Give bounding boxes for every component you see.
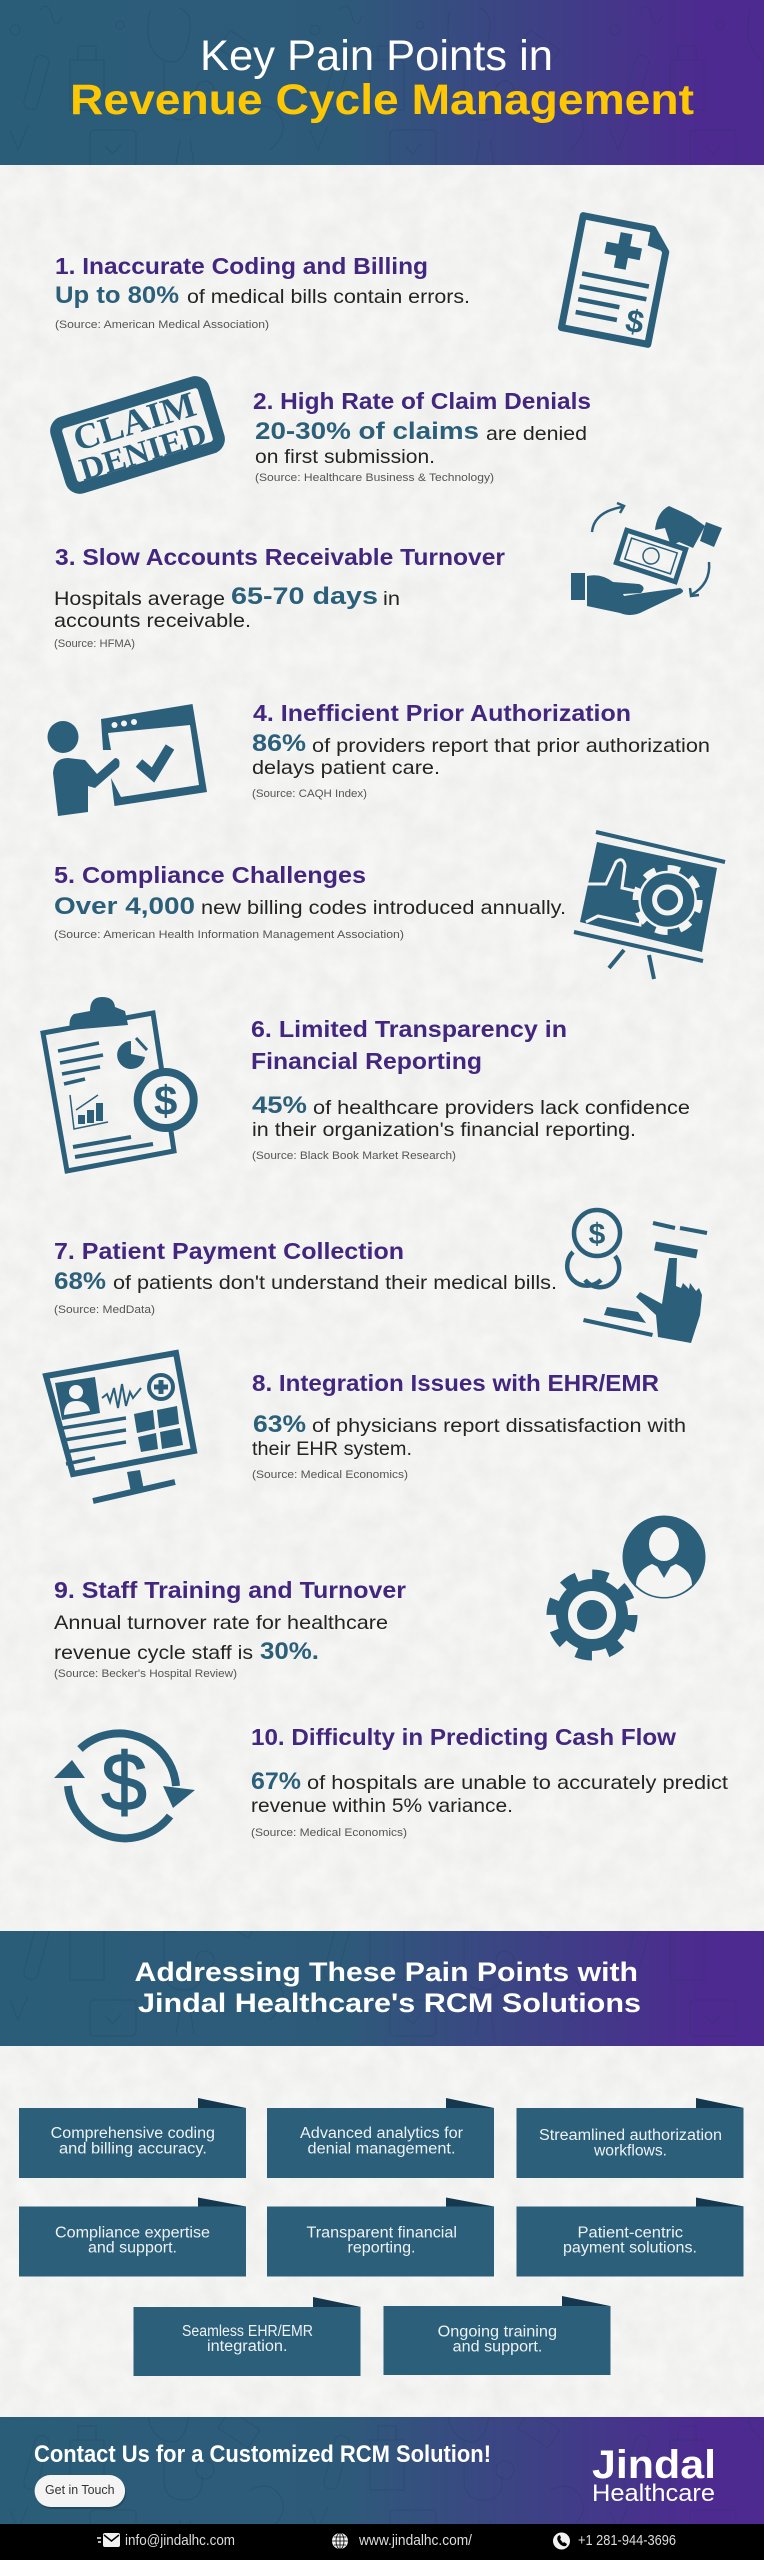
statement 6: 45% bbox=[252, 1092, 307, 1119]
icon: gear and staff person bbox=[552, 1516, 706, 1655]
statement 1: Up to 80% bbox=[55, 282, 179, 309]
card 8 bbox=[384, 2296, 610, 2375]
card 3: Streamlined authorization bbox=[539, 2127, 722, 2144]
solutions heading text bbox=[134, 1957, 641, 2018]
card 1: Comprehensive coding bbox=[51, 2125, 215, 2142]
statement 10 bbox=[251, 1768, 729, 1817]
panel: item 2 claim denials bbox=[54, 380, 591, 491]
statement 2: 20-30% of claims bbox=[255, 418, 479, 445]
source 4: (Source: CAQH Index) bbox=[252, 788, 367, 800]
panel: item 9 staff turnover bbox=[54, 1516, 706, 1680]
icon: circular arrows with dollar bbox=[54, 1733, 195, 1838]
statement 4: of providers report that prior authorization bbox=[312, 735, 710, 757]
solutions heading banner bbox=[0, 1931, 764, 2046]
statement 6 bbox=[252, 1092, 690, 1141]
statement 5 bbox=[54, 893, 566, 920]
heading 9: 9. Staff Training and Turnover bbox=[54, 1577, 406, 1603]
icon: circular arrows with dollar: $ bbox=[101, 1737, 147, 1828]
card 8: Ongoing training bbox=[438, 2324, 557, 2341]
panel: item 8 EHR integration bbox=[46, 1353, 686, 1501]
statement 5: new billing codes introduced annually. bbox=[201, 897, 566, 919]
source 7: (Source: MedData) bbox=[54, 1304, 155, 1316]
heading 8: 8. Integration Issues with EHR/EMR bbox=[252, 1370, 659, 1396]
source 9: (Source: Becker's Hospital Review) bbox=[54, 1668, 237, 1680]
card 6 bbox=[516, 2198, 744, 2276]
statement 8: of physicians report dissatisfaction with bbox=[312, 1415, 686, 1437]
card 1: and billing accuracy. bbox=[59, 2140, 207, 2158]
statement 1 bbox=[55, 282, 470, 309]
contact banner bbox=[0, 2417, 764, 2524]
icon: claim denied stamp bbox=[54, 380, 221, 491]
statement 6: in their organization's financial reporting. bbox=[252, 1119, 636, 1141]
statement 8: 63% bbox=[253, 1411, 306, 1438]
card 5: reporting. bbox=[348, 2240, 416, 2257]
icon: medical bill bbox=[561, 213, 673, 345]
heading 10: 10. Difficulty in Predicting Cash Flow bbox=[251, 1724, 676, 1750]
statement 10: revenue within 5% variance. bbox=[251, 1795, 513, 1817]
statement 2 bbox=[255, 418, 587, 468]
card 3 bbox=[516, 2098, 744, 2178]
source 2: (Source: Healthcare Business & Technology) bbox=[255, 472, 494, 484]
logo: Jindal Healthcare bbox=[592, 2443, 716, 2507]
heading 3: 3. Slow Accounts Receivable Turnover bbox=[55, 544, 505, 570]
card 7 bbox=[134, 2297, 361, 2376]
statement 9 bbox=[54, 1612, 388, 1665]
source 5: (Source: American Health Information Management Association) bbox=[54, 929, 404, 941]
heading 2: 2. High Rate of Claim Denials bbox=[253, 388, 591, 414]
statement 4: delays patient care. bbox=[252, 757, 440, 779]
statement 7: of patients don't understand their medical bills. bbox=[113, 1272, 557, 1294]
statement 3: 65-70 days bbox=[231, 583, 378, 610]
statement 7: 68% bbox=[54, 1268, 106, 1295]
card 6: Patient-centric bbox=[578, 2224, 683, 2242]
statement 3 bbox=[54, 583, 400, 632]
statement 9: Annual turnover rate for healthcare bbox=[54, 1612, 388, 1634]
statement 4 bbox=[252, 730, 710, 779]
icon: monitor with patient record bbox=[46, 1353, 194, 1501]
heading 7: 7. Patient Payment Collection bbox=[54, 1238, 404, 1264]
card 1 bbox=[19, 2098, 246, 2178]
phone contact: +1 281-944-3696 bbox=[578, 2532, 676, 2549]
panel: item 4 prior authorization bbox=[48, 700, 710, 816]
icon: clipboard with report and dollar bbox=[43, 997, 194, 1171]
panel: solution cards bbox=[19, 2098, 744, 2376]
icon: coins and pointing hand bbox=[567, 1210, 707, 1343]
source 1: (Source: American Medical Association) bbox=[55, 319, 269, 331]
icon: coins and pointing hand: $ bbox=[589, 1218, 606, 1251]
card 7: Seamless EHR/EMR bbox=[182, 2323, 313, 2340]
button: get in touch: Get in Touch bbox=[45, 2483, 115, 2497]
icon: claim denied stamp: CLAIM bbox=[68, 384, 200, 459]
title line two: Revenue Cycle Management bbox=[70, 76, 694, 124]
heading 6 bbox=[251, 1016, 567, 1074]
source 3: (Source: HFMA) bbox=[54, 638, 135, 650]
statement 8 bbox=[252, 1411, 686, 1460]
statement 3: accounts receivable. bbox=[54, 610, 251, 632]
icon: person presenting checkmark window bbox=[48, 704, 207, 816]
statement 7 bbox=[54, 1268, 557, 1295]
source 8: (Source: Medical Economics) bbox=[252, 1469, 408, 1481]
statement 10: 67% bbox=[251, 1768, 301, 1795]
title line one: Key Pain Points in bbox=[200, 32, 553, 80]
panel: item 5 compliance bbox=[54, 832, 725, 979]
icon: presentation board with thumb and gear bbox=[574, 832, 725, 979]
card 7: integration. bbox=[207, 2338, 288, 2355]
panel: item 3 accounts receivable bbox=[54, 503, 722, 650]
statement 4: 86% bbox=[252, 730, 306, 757]
email contact: info@jindalhc.com bbox=[125, 2532, 235, 2549]
logo: Jindal Healthcare: Jindal bbox=[592, 2443, 716, 2487]
card 4: and support. bbox=[88, 2240, 177, 2257]
solutions heading text: Addressing These Pain Points with bbox=[134, 1957, 638, 1987]
button: get in touch bbox=[35, 2475, 126, 2509]
statement 3: Hospitals average bbox=[54, 588, 225, 610]
card 2: Advanced analytics for bbox=[300, 2125, 463, 2142]
panel: item 1 inaccurate coding bbox=[55, 213, 673, 345]
header banner bbox=[0, 0, 764, 165]
panel: item 6 financial transparency bbox=[43, 997, 690, 1171]
statement 8: their EHR system. bbox=[252, 1438, 412, 1460]
phone contact bbox=[553, 2532, 676, 2550]
heading 1: 1. Inaccurate Coding and Billing bbox=[55, 253, 428, 279]
statement 9: 30%. bbox=[260, 1638, 319, 1665]
logo: Jindal Healthcare: Healthcare bbox=[592, 2480, 715, 2507]
contact heading: Contact Us for a Customized RCM Solution! bbox=[34, 2441, 491, 2468]
panel: item 10 cash flow bbox=[54, 1724, 729, 1839]
card 5: Transparent financial bbox=[306, 2224, 457, 2242]
card 5 bbox=[267, 2198, 494, 2276]
card 2: denial management. bbox=[308, 2140, 456, 2158]
statement 2: are denied bbox=[486, 423, 587, 445]
statement 1: of medical bills contain errors. bbox=[187, 286, 470, 308]
card 6: payment solutions. bbox=[563, 2240, 697, 2257]
source 10: (Source: Medical Economics) bbox=[251, 1827, 407, 1839]
heading 6: 6. Limited Transparency in bbox=[251, 1016, 567, 1042]
icon: medical bill: $ bbox=[623, 302, 647, 341]
icon: claim denied stamp: DENIED bbox=[75, 415, 211, 487]
statement 5: Over 4,000 bbox=[54, 893, 195, 920]
icon: money exchanged between hands bbox=[571, 503, 722, 615]
panel: item 7 patient payment bbox=[54, 1210, 707, 1343]
solutions heading text: Jindal Healthcare's RCM Solutions bbox=[138, 1988, 641, 2018]
statement 10: of hospitals are unable to accurately predict bbox=[307, 1772, 729, 1794]
heading 5: 5. Compliance Challenges bbox=[54, 862, 366, 888]
icon: clipboard with report and dollar: $ bbox=[154, 1077, 177, 1124]
source 6: (Source: Black Book Market Research) bbox=[252, 1150, 456, 1162]
website contact: www.jindalhc.com/ bbox=[358, 2532, 473, 2549]
heading 6: Financial Reporting bbox=[251, 1048, 482, 1074]
card 4: Compliance expertise bbox=[55, 2224, 210, 2242]
card 4 bbox=[19, 2198, 246, 2276]
statement 2: on first submission. bbox=[255, 446, 435, 468]
card 2 bbox=[267, 2098, 494, 2178]
footer contact bar bbox=[0, 2524, 764, 2560]
heading 4: 4. Inefficient Prior Authorization bbox=[253, 700, 631, 726]
card 8: and support. bbox=[453, 2338, 542, 2355]
card 3: workflows. bbox=[593, 2142, 667, 2160]
statement 3: in bbox=[383, 588, 400, 610]
statement 9: revenue cycle staff is bbox=[54, 1642, 253, 1664]
statement 6: of healthcare providers lack confidence bbox=[313, 1097, 690, 1119]
